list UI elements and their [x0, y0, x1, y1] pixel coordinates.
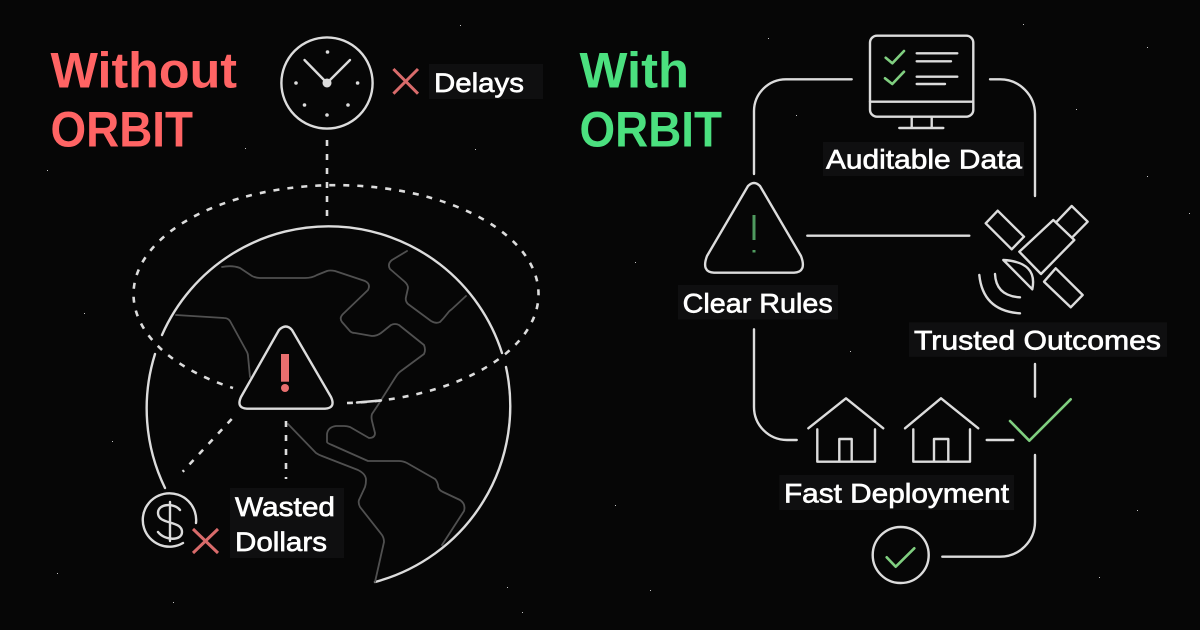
icon: circled check — [873, 527, 929, 583]
label: Fast Deployment: Fast Deployment — [784, 478, 1010, 508]
label: Trusted Outcomes: Trusted Outcomes — [914, 325, 1161, 355]
dashed link: warning to label — [285, 421, 287, 479]
title: Without ORBIT: ORBIT — [50, 102, 193, 158]
connector: warning to satellite — [807, 234, 969, 237]
icon: clock — [281, 37, 373, 129]
icon: delays cross — [393, 69, 418, 94]
label: Clear Rules: Clear Rules — [683, 288, 833, 318]
label: Delays — [429, 64, 543, 99]
dashed link: clock to orbit — [326, 140, 328, 220]
connector: monitor to satellite — [990, 79, 1035, 196]
connector: satellite to check — [1034, 364, 1036, 397]
connector: warning to monitor — [754, 79, 852, 174]
icon: dollar coin — [143, 493, 196, 547]
title: With ORBIT: ORBIT — [580, 102, 722, 158]
icon: house one — [808, 398, 883, 462]
title: Without ORBIT — [50, 42, 237, 158]
connector: check to circle — [942, 455, 1035, 557]
icon: house two — [905, 398, 978, 462]
title: Without ORBIT: Without — [50, 42, 237, 98]
globe continents — [176, 251, 466, 582]
icon: monitor checklist — [870, 36, 973, 128]
label: Wasted Dollars: Dollars — [235, 527, 327, 557]
panel: with ORBIT — [580, 36, 1167, 583]
panel: without ORBIT — [50, 37, 543, 582]
label: Wasted Dollars: Wasted — [235, 492, 335, 522]
title: With ORBIT: With — [580, 42, 689, 98]
icon: warning triangle — [239, 326, 333, 409]
label: Delays: Delays — [434, 68, 524, 98]
label: Wasted Dollars — [230, 488, 344, 558]
icon: warning triangle outline — [705, 183, 803, 273]
connector: houses to check — [987, 439, 1013, 441]
label: Auditable Data: Auditable Data — [826, 144, 1023, 174]
dashed link: warning to dollar — [183, 419, 232, 472]
globe outline — [147, 226, 510, 582]
icon: large check — [1010, 399, 1071, 441]
connector: warning to houses — [754, 329, 797, 440]
dashed orbit ellipse — [134, 185, 539, 403]
title: With ORBIT — [580, 42, 722, 158]
icon: satellite — [979, 206, 1088, 313]
icon: dollar cross — [193, 529, 218, 553]
